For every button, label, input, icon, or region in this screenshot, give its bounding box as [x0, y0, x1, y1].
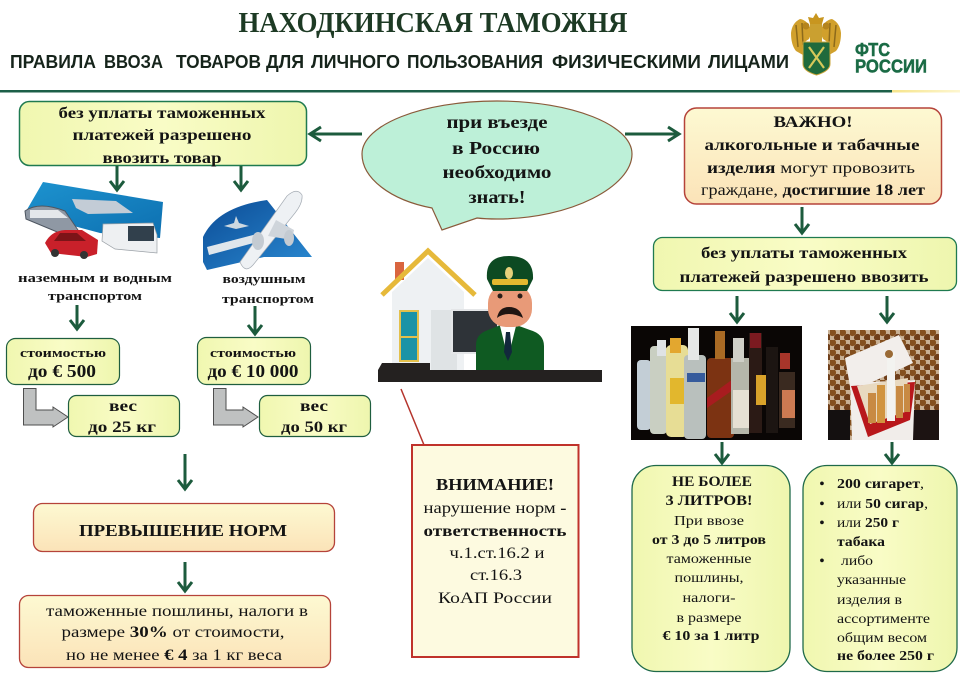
panel: tobacco limits: •	[820, 497, 825, 512]
panel: duties: таможенные пошлины, налоги в	[46, 603, 309, 620]
image: land and water transport	[25, 182, 163, 259]
panel: duties: размере 30% от стоимости,	[62, 624, 284, 641]
speech bubble	[362, 101, 632, 230]
arrow: bubble to left box	[310, 127, 362, 141]
panel: alcohol limits: от 3 до 5 литров	[652, 533, 766, 548]
arrow: left column down 1	[110, 166, 124, 190]
panel: important notice: граждане, достигшие 18 лет	[701, 182, 925, 199]
panel: attention: нарушение норм -	[424, 500, 566, 517]
computer	[431, 310, 498, 370]
panel: tobacco limits	[803, 466, 957, 672]
panel: alcohol limits: 3 ЛИТРОВ!	[666, 493, 752, 509]
panel: alcohol limits: При ввозе	[674, 514, 744, 529]
weight box: land: вес	[109, 398, 137, 415]
arrow: land to value	[70, 305, 84, 329]
icon: FCS emblem	[791, 13, 841, 75]
panel: attention: ст.16.3	[470, 567, 522, 584]
image: air transport	[203, 191, 312, 270]
panel: tobacco limits: либо	[841, 554, 873, 569]
arrow: air to value	[248, 306, 262, 334]
panel: alcohol limits: налоги-	[682, 591, 736, 606]
speech bubble: необходимо	[442, 162, 552, 182]
weight box: air: вес	[300, 398, 328, 415]
panel: tobacco limits: не более 250 г	[837, 649, 934, 664]
label: air transport: транспортом	[222, 292, 315, 306]
subtitle: ПОЛЬЗОВАНИЯ	[407, 52, 543, 72]
panel: alcohol limits: НЕ БОЛЕЕ	[672, 474, 752, 490]
panel: tobacco limits: 200 сигарет ,	[837, 477, 924, 492]
illustration: customs officer at desk	[378, 251, 602, 382]
panel: duty-free goods heading: без уплаты таможенных	[58, 105, 266, 122]
panel: tobacco limits: •	[820, 477, 825, 492]
panel: alcohol limits: пошлины,	[674, 571, 744, 586]
panel: tobacco limits: или 50 сигар ,	[837, 497, 928, 512]
arrow: bubble to right box	[625, 127, 679, 141]
value box: land: стоимостью	[20, 345, 106, 360]
logo text: FCS Russia: ФТС	[855, 40, 890, 60]
value box: land	[6, 338, 120, 384]
arrow: grey elbow land	[24, 388, 68, 427]
arrow: tobacco to limits	[885, 442, 899, 463]
label: air transport: воздушным	[222, 272, 306, 286]
label: air transport	[222, 272, 315, 306]
image: cigarettes	[828, 330, 939, 440]
weight box: land	[68, 396, 180, 436]
speech bubble: при въезде	[446, 112, 548, 132]
label: land and water transport: транспортом	[48, 289, 143, 303]
panel: tobacco limits: ассортименте	[837, 612, 930, 627]
arrow: grey elbow air	[214, 388, 258, 427]
desk	[378, 363, 602, 382]
arrow: to tobacco	[880, 296, 894, 322]
value box: land: до € 500	[28, 361, 96, 381]
subtitle: ФИЗИЧЕСКИМИ	[552, 52, 701, 72]
panel: attention: КоАП России	[438, 590, 553, 607]
speech bubble: в Россию	[452, 138, 540, 158]
arrow: alcohol to limits	[715, 442, 729, 463]
arrow: right column down	[795, 207, 809, 233]
value box: air: до € 10 000	[208, 361, 299, 381]
title: НАХОДКИНСКАЯ ТАМОЖНЯ	[238, 8, 628, 39]
arrow: to alcohol	[730, 296, 744, 322]
officer	[476, 256, 544, 371]
house	[382, 251, 475, 370]
label: land and water transport	[18, 271, 173, 303]
panel: duties: но не менее € 4 за 1 кг веса	[66, 647, 282, 664]
subtitle: ЛИЧНОГО	[311, 52, 400, 72]
weight box: land: до 25 кг	[88, 419, 156, 436]
panel: tobacco limits: общим весом	[837, 631, 927, 646]
label: land and water transport: наземным и водным	[18, 271, 173, 285]
panel: duty-free import right	[654, 238, 956, 290]
panel: duties	[20, 596, 330, 668]
panel: alcohol limits: € 10 за 1 литр	[662, 629, 760, 644]
subtitle	[10, 52, 789, 72]
panel: excess of norms: ПРЕВЫШЕНИЕ НОРМ	[79, 521, 287, 540]
panel: tobacco limits: или 250 г	[837, 516, 899, 531]
panel: important notice: ВАЖНО!	[774, 114, 852, 131]
panel: attention: ч.1.ст.16.2 и	[450, 545, 545, 562]
subtitle: ЛИЦАМИ	[708, 52, 789, 72]
subtitle: ДЛЯ	[266, 52, 304, 72]
panel: alcohol limits	[632, 466, 790, 672]
panel: important notice: изделия могут провозить	[707, 160, 915, 177]
panel: alcohol limits: таможенные	[666, 552, 752, 567]
panel: important notice: алкогольные и табачные	[704, 137, 920, 154]
logo text: FCS Russia: РОССИИ	[855, 56, 927, 76]
arrow: to duties	[178, 562, 192, 591]
panel: tobacco limits: табака	[837, 535, 885, 550]
panel: excess of norms	[34, 504, 334, 552]
subtitle: ТОВАРОВ	[176, 52, 261, 72]
arrow: to excess	[178, 454, 192, 489]
panel: tobacco limits: указанные	[837, 573, 906, 588]
panel: attention	[412, 445, 578, 657]
connector line	[401, 389, 424, 445]
panel: duty-free goods heading	[20, 102, 306, 167]
value box: air: стоимостью	[210, 345, 296, 360]
panel: tobacco limits: •	[820, 516, 825, 531]
subtitle: ВВОЗА	[104, 52, 163, 72]
subtitle: ПРАВИЛА	[10, 52, 96, 72]
panel: duty-free import right: без уплаты таможенных	[701, 245, 907, 262]
panel: important notice	[684, 108, 942, 204]
panel: tobacco limits: изделия в	[837, 593, 902, 608]
weight box: air	[260, 396, 370, 436]
weight box: air: до 50 кг	[281, 419, 347, 436]
header rule	[0, 90, 960, 92]
arrow: left column down 2	[234, 166, 248, 190]
speech bubble: знать!	[468, 187, 526, 207]
panel: tobacco limits: •	[820, 554, 825, 569]
panel: duty-free goods heading: ввозить товар	[102, 150, 222, 167]
logo text: FCS Russia	[855, 40, 927, 76]
panel: duty-free import right: платежей разрешено ввозить	[680, 269, 929, 286]
panel: attention: ВНИМАНИЕ!	[436, 475, 554, 494]
panel: alcohol limits: в размере	[676, 611, 742, 626]
panel: attention: ответственность	[424, 523, 567, 540]
panel: duty-free goods heading: платежей разрешено	[72, 127, 252, 144]
image: bottles	[631, 326, 802, 440]
value box: air	[198, 338, 310, 384]
